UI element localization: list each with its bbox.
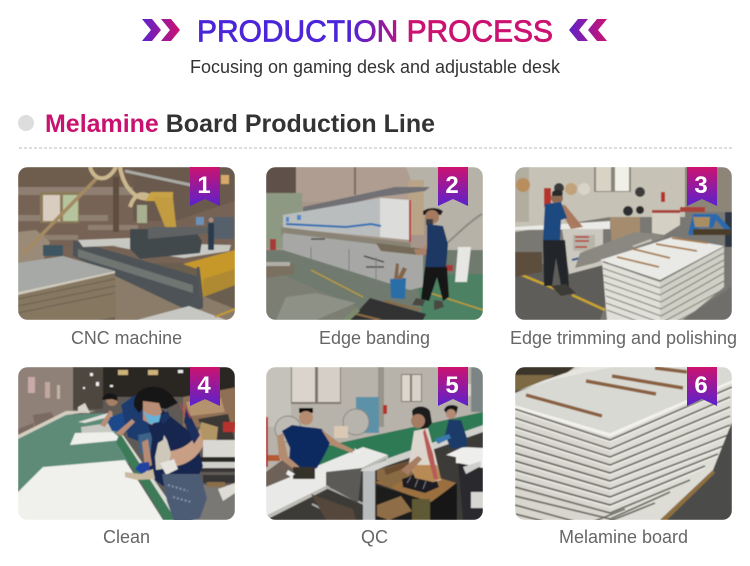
ribbon badge: 1: 1 xyxy=(197,172,211,199)
photo: edge banding machine xyxy=(266,167,483,320)
subtitle: Focusing on gaming desk and adjustable desk xyxy=(190,57,561,77)
photo: edge trimming workshop xyxy=(515,167,732,330)
panel: step 6 melamine board xyxy=(515,367,732,547)
ribbon badge: 1 xyxy=(190,167,220,206)
panel: step 3 edge trimming and polishing xyxy=(510,167,737,348)
caption: QC xyxy=(361,527,388,547)
caption: Clean xyxy=(103,527,150,547)
ribbon badge: 4: 4 xyxy=(197,372,211,399)
heading text: Melamine Board Production Line xyxy=(45,110,435,138)
ribbon badge: 5: 5 xyxy=(445,372,459,399)
caption: Edge trimming and polishing xyxy=(510,328,737,348)
ribbon badge: 6 xyxy=(687,367,717,406)
title banner xyxy=(142,14,607,48)
ribbon badge: 4 xyxy=(190,367,220,406)
icon: right double chevron xyxy=(569,19,607,41)
panel: step 1 CNC machine xyxy=(18,167,235,348)
panel: step 4 clean xyxy=(18,367,238,547)
panel: step 2 edge banding xyxy=(266,167,483,348)
section heading xyxy=(18,110,435,138)
photo: cleaning on conveyor xyxy=(18,367,238,521)
photo: CNC machine xyxy=(18,167,235,320)
ribbon badge: 2: 2 xyxy=(445,172,459,199)
photo: quality control line xyxy=(266,367,483,520)
caption: Edge banding xyxy=(319,328,430,348)
icon: left double chevron xyxy=(142,19,180,41)
ribbon badge: 3: 3 xyxy=(694,172,708,199)
heading: production process: PRODUCTION PROCESS xyxy=(197,14,553,48)
ribbon badge: 6: 6 xyxy=(694,372,708,399)
panel: step 5 QC xyxy=(266,367,483,547)
bullet dot xyxy=(18,115,34,131)
caption: Melamine board xyxy=(559,527,688,547)
photo: stack of melamine boards xyxy=(515,367,732,529)
ribbon badge: 5 xyxy=(438,367,468,406)
ribbon badge: 2 xyxy=(438,167,468,206)
caption: CNC machine xyxy=(71,328,182,348)
ribbon badge: 3 xyxy=(687,167,717,206)
